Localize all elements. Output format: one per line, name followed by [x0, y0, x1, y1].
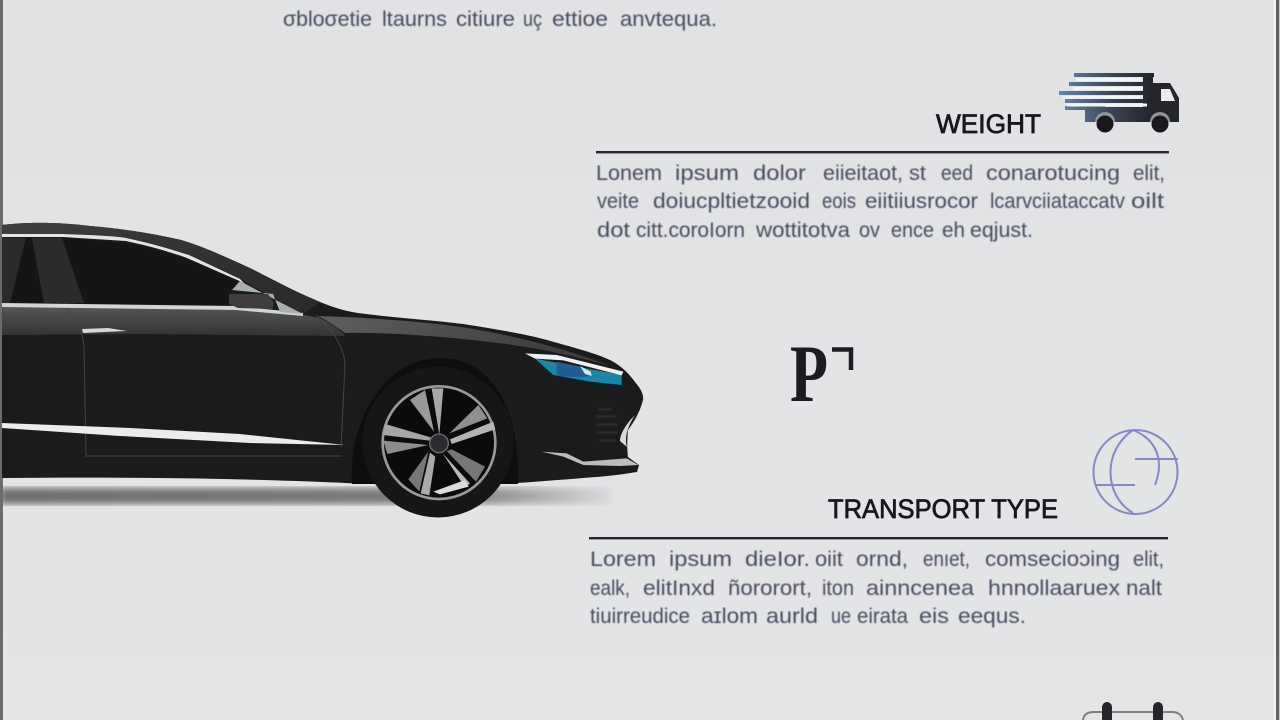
- door handle: [82, 328, 127, 333]
- text block: transport description: ornd,: [856, 548, 908, 571]
- text block: weight description: elit,: [1133, 162, 1165, 185]
- text block: weight description: [596, 162, 1165, 242]
- window sill chrome: [2, 303, 303, 316]
- top text line: [283, 8, 717, 31]
- text block: transport description: oiit: [815, 548, 843, 571]
- text block: weight description: st: [909, 162, 926, 185]
- text block: transport description: ealk,: [590, 577, 630, 600]
- text block: transport description: tiuirreudice: [590, 605, 690, 628]
- window frame chrome: [2, 234, 244, 283]
- side chrome strip: [2, 423, 345, 445]
- text block: weight description: eiitiiusrocor: [865, 190, 978, 213]
- text block: transport description: hnnollaaruex: [988, 577, 1121, 600]
- text block: weight description: veite: [597, 190, 639, 213]
- windshield sliver: [232, 281, 303, 314]
- top text line: σbloσetie: [283, 8, 372, 31]
- text block: transport description: eequs.: [958, 605, 1026, 628]
- text block: transport description: ñororort,: [728, 577, 812, 600]
- text block: weight description: conarotucing: [986, 162, 1120, 185]
- top text line: citiure: [456, 8, 515, 31]
- text block: weight description: ipsum: [675, 162, 739, 185]
- text block: weight description: eiieitaot,: [823, 162, 903, 185]
- hood highlight: [318, 316, 610, 366]
- text block: weight description: ence: [891, 219, 934, 242]
- side mirror: [229, 294, 273, 309]
- text block: transport description: ue: [831, 605, 851, 628]
- front grille: [596, 408, 618, 442]
- glyph: hook mark: [832, 350, 851, 370]
- wheel spokes: [383, 388, 495, 495]
- text block: weight description: oilt: [1131, 190, 1164, 213]
- heading: weight: WEIGHT: [936, 109, 1041, 139]
- text block: transport description: enıet,: [923, 548, 970, 571]
- text block: transport description: aurld: [766, 605, 818, 628]
- right edge frame: [1274, 0, 1280, 720]
- text block: transport description: nalt: [1126, 577, 1162, 600]
- text block: weight description: ov: [859, 219, 880, 242]
- rear window shade: [2, 238, 26, 303]
- section: stray glyph: [790, 328, 851, 419]
- text block: transport description: aɪlom: [701, 605, 758, 628]
- headlight: [525, 353, 623, 385]
- text block: transport description: iton: [822, 577, 854, 600]
- top text line: anvtequa.: [620, 8, 717, 31]
- text block: transport description: Lorem: [590, 548, 656, 571]
- bumper lip chrome: [542, 452, 638, 466]
- door seams: [67, 308, 345, 456]
- text block: transport description: dieIor.: [745, 548, 810, 571]
- text block: transport description: [590, 548, 1164, 628]
- icon: partial bottom icon: [1083, 702, 1183, 720]
- section: weight: [596, 73, 1179, 242]
- text block: weight description: eed: [941, 162, 973, 185]
- text block: transport description: comsecioɔing: [985, 548, 1120, 571]
- roof highlight: [2, 223, 320, 314]
- text block: transport description: elitInxd: [643, 577, 715, 600]
- car: [0, 223, 643, 517]
- text block: weight description: wottitotva: [755, 219, 850, 242]
- text block: weight description: eois: [822, 190, 856, 213]
- text block: weight description: Lonem: [596, 162, 662, 185]
- section: transport type: [589, 430, 1178, 628]
- top text line: ettioe: [552, 8, 608, 31]
- car body: [2, 223, 643, 484]
- icon: delivery truck: [1059, 73, 1179, 132]
- text block: weight description: doiucpltietzooid: [653, 190, 810, 213]
- text block: transport description: ipsum: [669, 548, 732, 571]
- text block: transport description: eirata: [857, 605, 908, 628]
- ground shadow: [0, 488, 610, 504]
- text block: transport description: eis: [919, 605, 949, 628]
- text block: transport description: ainncenea: [866, 577, 974, 600]
- text block: weight description: lcarvciiataccatv: [990, 190, 1125, 213]
- top text line: ltaurns: [382, 8, 447, 31]
- top text line: uç: [523, 8, 542, 31]
- icon: globe: [1094, 430, 1178, 514]
- wheel arch: [352, 358, 518, 484]
- text block: weight description: eh: [942, 219, 965, 242]
- glyph: serif P: P: [790, 328, 828, 419]
- front wheel: [362, 366, 514, 518]
- heading: transport type: TRANSPORT TYPE: [828, 494, 1058, 524]
- text block: transport description: elit,: [1133, 548, 1164, 571]
- text block: weight description: eqjust.: [970, 219, 1033, 242]
- text block: weight description: dot: [597, 219, 630, 242]
- left edge frame: [0, 0, 3, 720]
- text block: weight description: dolor: [753, 162, 806, 185]
- body shoulder band: [2, 306, 345, 336]
- front bumper vent chrome: [620, 415, 635, 447]
- door pillar: [32, 238, 84, 303]
- text block: weight description: citt.coroIorn: [636, 219, 745, 242]
- side windows: [2, 238, 240, 306]
